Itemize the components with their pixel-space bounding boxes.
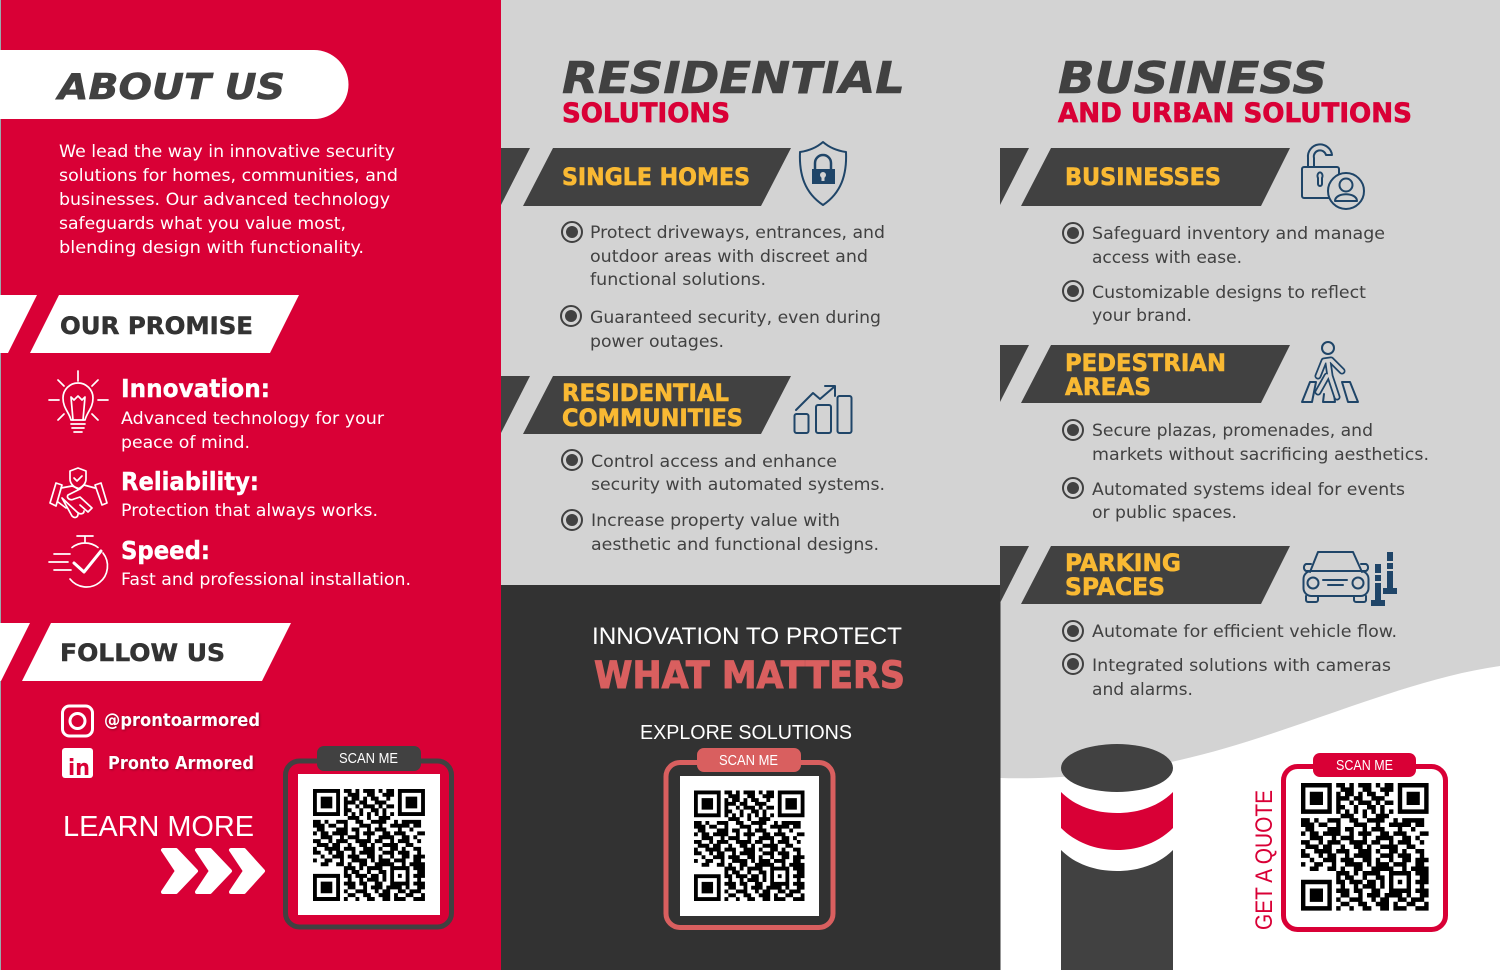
qr card: explore solutions: SCAN ME <box>719 752 778 769</box>
bullets: single homes: outdoor areas with discreet and <box>590 247 868 267</box>
icon: linkedin <box>62 748 93 781</box>
banner: residential communities: COMMUNITIES <box>562 404 743 432</box>
qr card: explore solutions <box>666 748 833 928</box>
icon: innovation light bulb <box>49 371 108 432</box>
icon: instagram <box>62 706 92 736</box>
about text block: businesses. Our advanced technology <box>59 190 390 210</box>
innovation text <box>121 374 384 453</box>
banner: parking spaces: PARKING <box>1065 549 1181 577</box>
bullets: single homes: Protect driveways, entrances, and <box>590 223 885 243</box>
banner: parking spaces: SPACES <box>1065 573 1165 601</box>
bullets: residential communities: Increase property value with <box>591 511 840 531</box>
about text block: We lead the way in innovative security <box>59 142 395 162</box>
banner: our promise: OUR PROMISE <box>60 312 253 340</box>
reliability text <box>121 467 378 521</box>
innovation text: Advanced technology for your <box>121 409 384 429</box>
bullets: businesses <box>1063 223 1385 326</box>
bullets: parking spaces: Automate for efficient vehicle flow. <box>1092 622 1397 642</box>
bullets: single homes: functional solutions. <box>590 270 766 290</box>
bullets: businesses: your brand. <box>1092 306 1192 326</box>
qr card: learn more: SCAN ME <box>339 750 398 767</box>
icon: linkedin: in <box>68 756 90 781</box>
speed text: Speed: <box>121 536 210 565</box>
bullets: parking spaces <box>1063 621 1397 700</box>
bullets: businesses: Customizable designs to reflect <box>1092 283 1366 303</box>
bullets: residential communities: security with automated systems. <box>591 475 885 495</box>
bullets: pedestrian areas: markets without sacrificing aesthetics. <box>1092 445 1429 465</box>
icon: lock with person <box>1302 144 1364 209</box>
speed text: Fast and professional installation. <box>121 570 411 590</box>
bullets: single homes <box>561 222 885 352</box>
about text block: safeguards what you value most, <box>59 214 346 234</box>
banner: pedestrian areas: PEDESTRIAN <box>1065 349 1226 377</box>
banner: single homes <box>501 148 791 206</box>
banner: pedestrian areas: AREAS <box>1065 373 1151 401</box>
bullets: single homes: Guaranteed security, even during <box>590 308 881 328</box>
bullets: residential communities: aesthetic and functional designs. <box>591 535 879 555</box>
heading: about us pill <box>0 50 348 119</box>
bullets: parking spaces: Integrated solutions with cameras <box>1092 656 1391 676</box>
arrow: triple chevrons <box>163 850 263 892</box>
bullets: residential communities: Control access and enhance <box>591 452 837 472</box>
panel: residential solutions <box>501 53 905 555</box>
reliability text: Protection that always works. <box>121 501 378 521</box>
qr card: get a quote: SCAN ME <box>1336 757 1393 774</box>
icon: shield with lock <box>800 142 846 205</box>
bullets: businesses: Safeguard inventory and manage <box>1092 224 1385 244</box>
heading: residential: RESIDENTIAL <box>562 53 905 104</box>
icon: rising bar chart <box>794 386 852 433</box>
icon: pedestrian crossing <box>1302 342 1358 402</box>
get a quote label: GET A QUOTE <box>1251 790 1278 930</box>
qr card: get a quote <box>1284 753 1446 930</box>
banner: follow us: FOLLOW US <box>60 639 225 667</box>
icon: reliability handshake <box>50 468 107 517</box>
bullets: pedestrian areas: or public spaces. <box>1092 503 1237 523</box>
banner: follow us <box>0 623 291 681</box>
bullets: businesses: access with ease. <box>1092 248 1242 268</box>
banner: single homes: SINGLE HOMES <box>562 163 750 191</box>
about text block: solutions for homes, communities, and <box>59 166 398 186</box>
white wave background <box>1000 666 1500 970</box>
bullets: parking spaces: and alarms. <box>1092 680 1193 700</box>
subheading: and urban solutions: AND URBAN SOLUTIONS <box>1058 98 1412 129</box>
about text block <box>59 142 398 258</box>
panel: business and urban solutions <box>1000 53 1500 970</box>
icon: speed stopwatch <box>49 536 107 587</box>
illustration: bollard <box>1061 744 1173 970</box>
reliability text: Reliability: <box>121 467 259 496</box>
banner: parking spaces <box>1000 546 1290 604</box>
callout line: innovation to protect: INNOVATION TO PROTECT <box>592 623 902 650</box>
panel: innovation callout <box>501 585 1000 970</box>
banner: businesses: BUSINESSES <box>1065 163 1221 191</box>
explore solutions label: EXPLORE SOLUTIONS <box>640 722 852 744</box>
banner: residential communities: RESIDENTIAL <box>562 379 729 407</box>
about text block: blending design with functionality. <box>59 238 364 258</box>
bullets: residential communities <box>562 450 885 555</box>
heading: about us pill: ABOUT US <box>55 67 285 108</box>
bullets: pedestrian areas: Secure plazas, promenades, and <box>1092 421 1373 441</box>
qr card: learn more <box>286 746 452 927</box>
bullets: pedestrian areas <box>1063 420 1429 523</box>
bullets: pedestrian areas: Automated systems ideal for events <box>1092 480 1405 500</box>
callout heading: what matters: WHAT MATTERS <box>594 654 905 697</box>
banner: residential communities <box>501 376 791 434</box>
learn more label: LEARN MORE <box>63 811 254 843</box>
subheading: solutions: SOLUTIONS <box>562 98 730 129</box>
banner: pedestrian areas <box>1000 345 1290 403</box>
instagram handle: @prontoarmored <box>104 710 260 731</box>
linkedin name: Pronto Armored <box>108 753 254 774</box>
speed text <box>121 536 411 590</box>
icon: car and bollards <box>1304 552 1397 606</box>
innovation text: Innovation: <box>121 374 270 403</box>
banner: our promise <box>0 295 299 353</box>
innovation text: peace of mind. <box>121 433 250 453</box>
heading: business: BUSINESS <box>1058 53 1327 104</box>
bullets: single homes: power outages. <box>590 332 724 352</box>
panel: about us <box>0 0 501 970</box>
banner: businesses <box>1000 148 1290 206</box>
